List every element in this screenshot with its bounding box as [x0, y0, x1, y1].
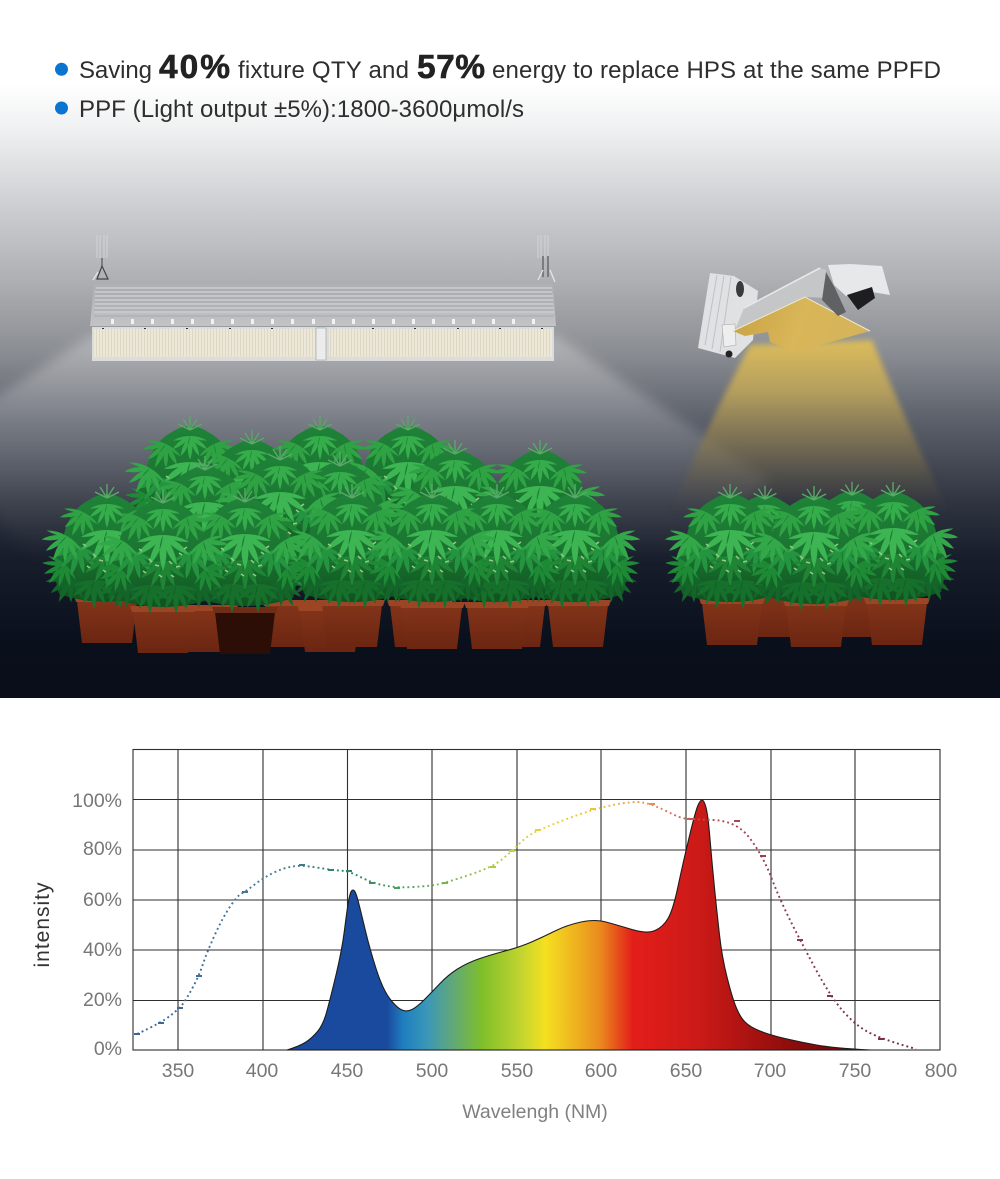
chart grid	[133, 749, 940, 1050]
left plant group (LED)	[35, 416, 647, 654]
headline bullets	[55, 49, 941, 123]
spectrum chart	[31, 749, 957, 1123]
HPS fixture	[698, 264, 890, 358]
LED panels	[92, 327, 554, 361]
y axis labels: 40%	[83, 939, 122, 961]
x axis labels: 800	[925, 1060, 957, 1082]
lamp connector	[822, 272, 846, 316]
gold reflector	[733, 297, 870, 352]
ballast box	[698, 273, 758, 358]
y axis labels	[72, 790, 122, 1060]
yellow HPS light beam	[665, 340, 955, 525]
right plant group (HPS)	[658, 482, 965, 647]
y axis labels: 20%	[83, 989, 122, 1011]
bullet line 1	[55, 49, 941, 86]
LED fixture	[90, 235, 556, 361]
bracket	[722, 324, 736, 347]
x axis labels: 450	[331, 1060, 363, 1082]
x axis labels: 650	[670, 1060, 702, 1082]
x axis labels: 350	[162, 1060, 194, 1082]
bullet line 1: 57%	[417, 49, 485, 86]
dotted reference curve	[134, 802, 916, 1049]
x axis title: Wavelengh (NM)	[462, 1101, 608, 1123]
bullet line 1: fixture QTY and	[238, 57, 409, 84]
x axis labels: 700	[754, 1060, 786, 1082]
bullet line 2: PPF (Light output ±5%):1800-3600μmol/s	[79, 96, 524, 123]
bullet line 1: 40%	[159, 49, 230, 86]
x axis labels: 750	[839, 1060, 871, 1082]
reflector housing	[735, 268, 830, 330]
x axis labels	[162, 1060, 957, 1082]
white tabs	[111, 319, 535, 324]
y axis labels: 60%	[83, 889, 122, 911]
y axis title: intensity	[31, 882, 54, 968]
y axis labels: 100%	[72, 790, 122, 812]
y axis labels: 0%	[94, 1038, 122, 1060]
bullet line 1: Saving	[79, 57, 152, 84]
x axis labels: 500	[416, 1060, 448, 1082]
right hanger	[538, 235, 555, 282]
left hanger	[93, 235, 108, 280]
y axis labels: 80%	[83, 838, 122, 860]
bullet line 1: energy to replace HPS at the same PPFD	[492, 57, 941, 84]
heatsink	[90, 284, 556, 326]
photo background panel	[0, 0, 1000, 698]
x axis labels: 400	[246, 1060, 278, 1082]
white LED light beam	[0, 335, 770, 590]
spectrum area	[287, 800, 870, 1050]
x axis labels: 550	[501, 1060, 533, 1082]
x axis labels: 600	[585, 1060, 617, 1082]
